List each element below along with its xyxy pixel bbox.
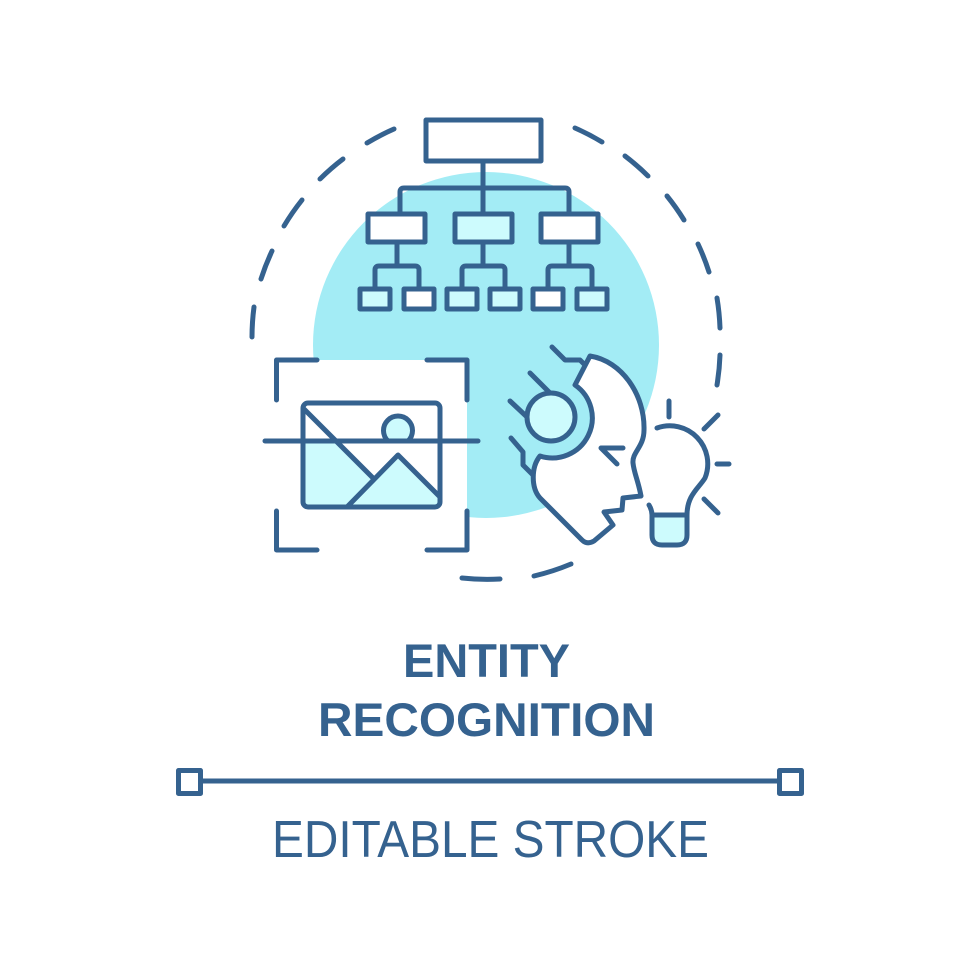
top box [426, 120, 541, 161]
title: RECOGNITION [318, 693, 655, 746]
picture fills [303, 441, 373, 507]
title [318, 634, 655, 746]
middle boxes [368, 214, 598, 242]
picture outline [265, 360, 478, 550]
image scan icon [265, 360, 478, 550]
background circle [313, 172, 659, 518]
circuit lines [510, 347, 585, 475]
org chart icon [360, 120, 607, 309]
dashed ring [252, 128, 720, 579]
rays [669, 401, 729, 513]
bulb base [652, 515, 687, 545]
face [533, 356, 644, 543]
bulb glass [657, 426, 708, 515]
white backing [300, 360, 467, 530]
ear circle [527, 393, 575, 441]
scan corners [276, 360, 467, 550]
connectors [375, 161, 592, 289]
divider with handles [178, 770, 802, 794]
eye [601, 448, 623, 464]
light bulb icon [649, 401, 729, 545]
AI head icon [510, 347, 644, 543]
sun [384, 416, 413, 441]
bottom boxes [360, 289, 607, 309]
subtitle: EDITABLE STROKE [272, 811, 709, 869]
title: ENTITY [403, 634, 570, 687]
